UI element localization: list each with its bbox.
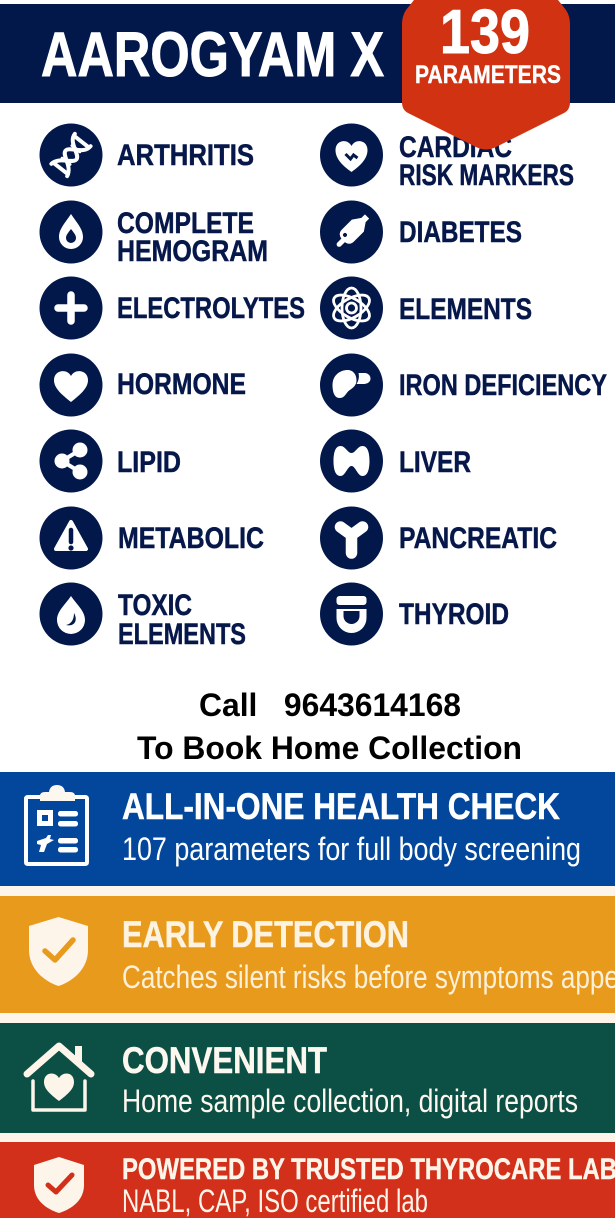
header bar (0, 4, 615, 103)
badge: 139 parameters (402, 0, 570, 150)
label: THYROID (399, 598, 509, 631)
badge label: PARAMETERS (415, 61, 561, 89)
icon: thyroid lobes (320, 430, 383, 492)
label: LIPID (117, 446, 181, 479)
icon: dna (40, 124, 102, 186)
phone number: Call 9643614168 (199, 687, 461, 723)
item: electrolytes (40, 276, 305, 340)
icon: heart pulse (320, 124, 383, 186)
item: iron deficiency (320, 354, 607, 416)
item: toxic elements (40, 582, 246, 651)
background: benefit bands (0, 886, 615, 1218)
icon: cup (320, 582, 383, 646)
item: arthritis (40, 124, 254, 186)
panel: parameter list (40, 124, 607, 651)
item: diabetes (320, 200, 522, 264)
icon: y-shaped organ (320, 506, 383, 570)
badge number: 139 (440, 0, 530, 67)
booking text: To Book Home Collection (137, 730, 522, 766)
label: TOXIC (118, 589, 192, 622)
item: thyroid (320, 582, 509, 646)
label: ARTHRITIS (117, 139, 254, 172)
panel: early detection (0, 896, 615, 1013)
icon: clipboard (26, 785, 87, 864)
label line 2: ELEMENTS (118, 618, 246, 651)
label: DIABETES (399, 216, 522, 249)
item: hormone (40, 354, 246, 416)
description: NABL, CAP, ISO certified lab (122, 1183, 428, 1218)
label: ELECTROLYTES (117, 292, 305, 325)
panel: all-in-one health check (0, 772, 615, 886)
label: ELEMENTS (399, 293, 532, 326)
label: LIVER (399, 446, 471, 479)
label: HORMONE (117, 368, 246, 401)
heading: EARLY DETECTION (122, 914, 409, 955)
item: metabolic (40, 506, 264, 570)
heading: CONVENIENT (122, 1040, 327, 1081)
panel: trusted lab (0, 1142, 615, 1218)
label: COMPLETE (117, 207, 254, 240)
icon: plus (40, 276, 102, 340)
label: CARDIAC (399, 131, 512, 164)
item: cardiac risk markers (320, 124, 574, 192)
call to action (137, 687, 522, 766)
label: METABOLIC (118, 522, 264, 555)
item: liver (320, 430, 471, 492)
icon: heart (40, 354, 102, 416)
icon: shield check (29, 917, 88, 986)
icon: drop with crescent (40, 582, 102, 646)
panel: convenient (0, 1023, 615, 1133)
title: AAROGYAM X (41, 20, 384, 90)
icon: shield check (34, 1157, 84, 1213)
icon: syringe (320, 200, 383, 264)
item: pancreatic (320, 506, 557, 570)
item: lipid (40, 430, 181, 492)
label line 2: HEMOGRAM (117, 235, 268, 268)
icon: organ (320, 354, 383, 416)
item: complete hemogram (40, 200, 268, 268)
icon: blood drop (40, 200, 102, 264)
icon: warning triangle (40, 506, 102, 570)
icon: atom (320, 276, 383, 340)
item: elements (320, 276, 532, 340)
icon: share nodes (40, 430, 102, 492)
icon: house with heart (27, 1046, 91, 1110)
label: PANCREATIC (399, 522, 557, 555)
